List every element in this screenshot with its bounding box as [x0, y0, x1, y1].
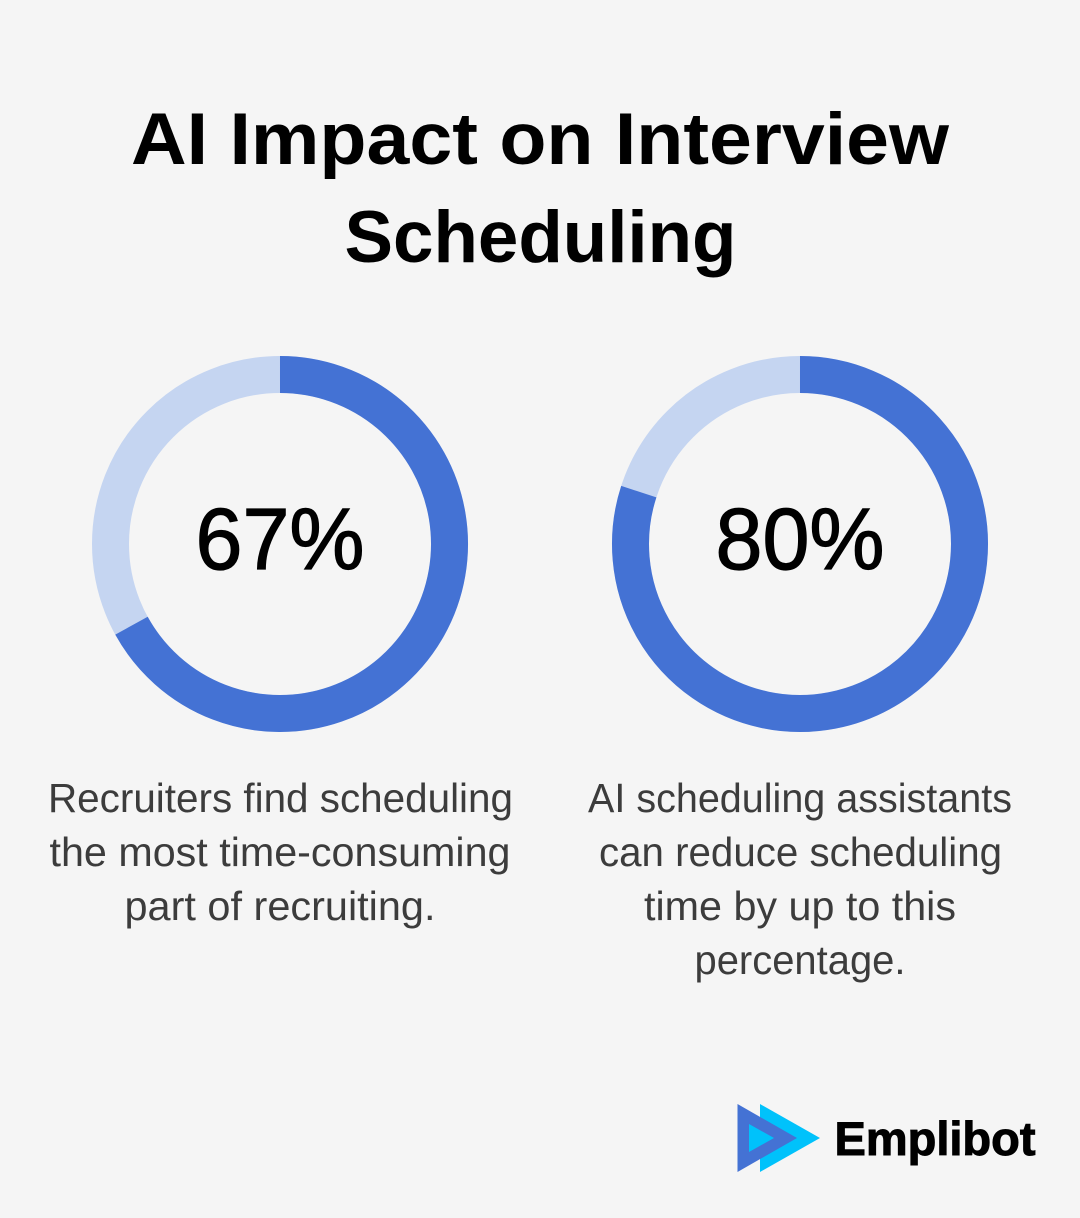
value: 67%: 67%: [196, 491, 364, 588]
description: AI assistants: AI scheduling assistants: [588, 775, 1012, 821]
panel: 80% statistic: [588, 374, 1012, 983]
description: recruiters: Recruiters find scheduling: [48, 775, 513, 821]
description: AI assistants: percentage.: [694, 937, 906, 983]
description: AI assistants: time by up to this: [644, 883, 956, 929]
logo: Emplibot: [738, 1104, 1036, 1172]
title: AI Impact on Interview: [131, 99, 949, 180]
description: recruiters: [48, 775, 513, 929]
description: AI assistants: [588, 775, 1012, 983]
description: recruiters: the most time-consuming: [50, 829, 510, 875]
value: 80%: 80%: [716, 491, 884, 588]
donut chart: 80%: [630, 374, 970, 714]
title: [131, 99, 949, 278]
panel: 67% statistic: [48, 374, 513, 929]
title: Scheduling: [344, 197, 736, 278]
icon: play triangles: [738, 1104, 820, 1172]
description: recruiters: part of recruiting.: [124, 883, 436, 929]
logo wordmark: Emplibot: [834, 1112, 1036, 1165]
donut chart: 67%: [110, 374, 450, 714]
description: AI assistants: can reduce scheduling: [599, 829, 1002, 875]
